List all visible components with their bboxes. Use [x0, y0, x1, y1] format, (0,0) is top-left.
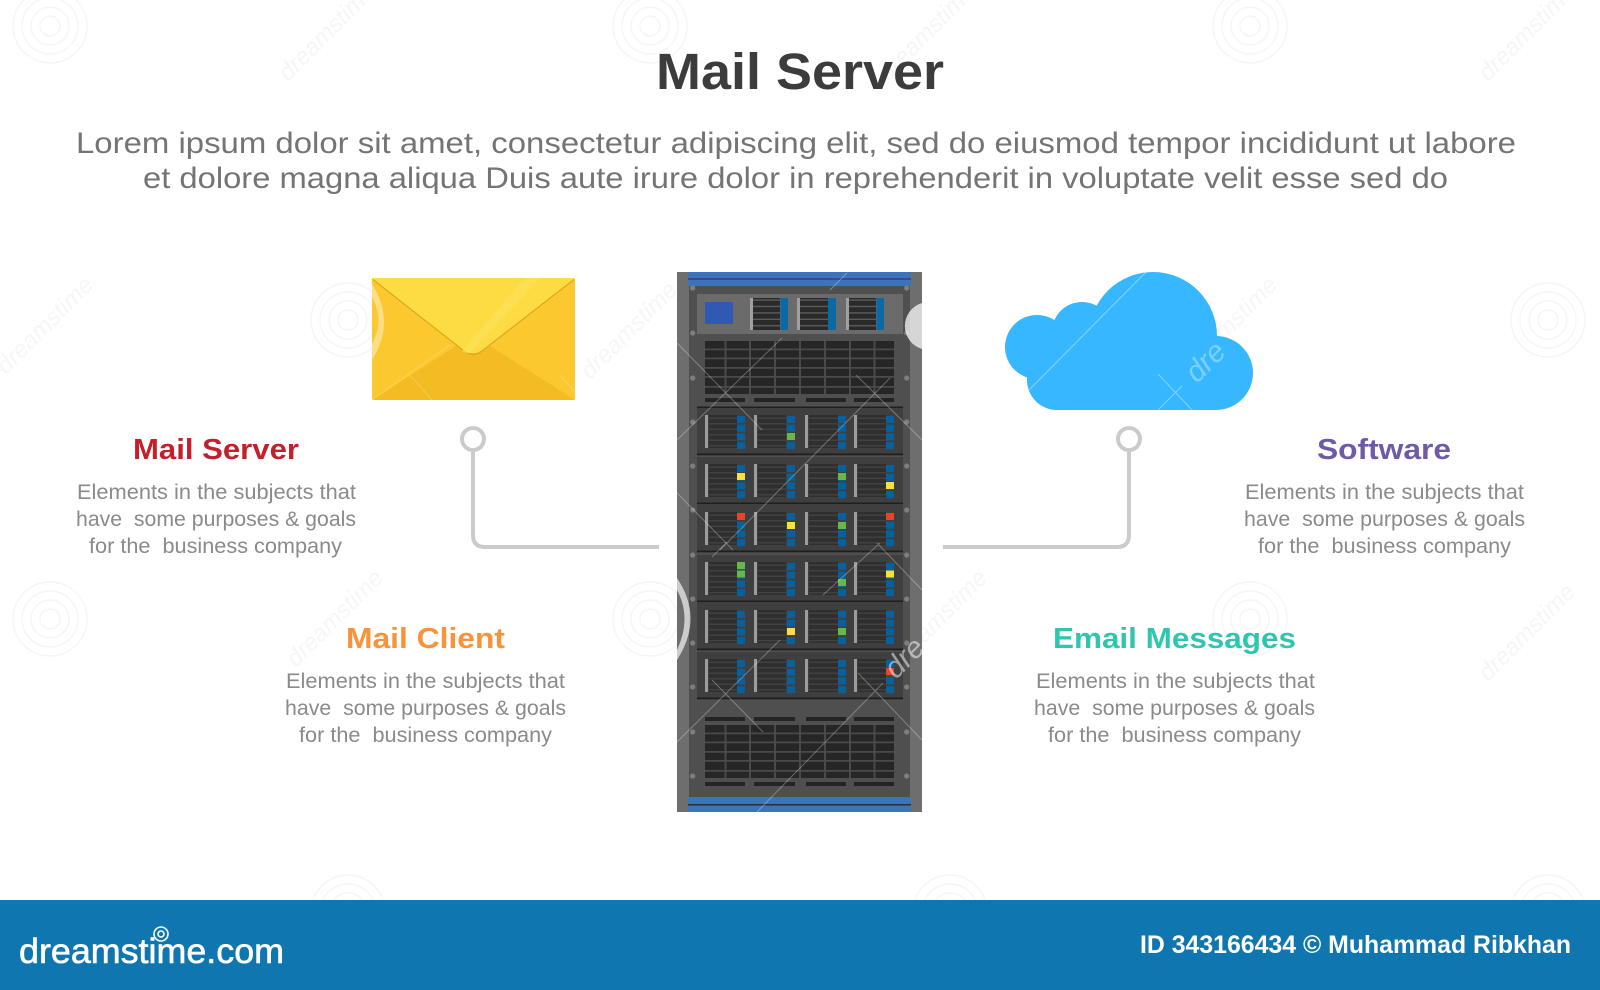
server unit 6 — [697, 652, 903, 699]
subtitle text block: Lorem ipsum dolor sit amet, consectetur adipiscing elit, sed do eiusmod tempor incididunt ut labore — [76, 127, 1516, 160]
description — [285, 670, 566, 747]
description: Elements in the subjects that — [286, 670, 565, 693]
rack screws — [690, 285, 909, 779]
connector: envelope to server — [462, 428, 659, 547]
heading: Mail Client — [346, 623, 505, 655]
label: Mail Client — [285, 623, 566, 747]
watermark overlay text — [878, 335, 1233, 685]
footer bar — [0, 900, 1600, 990]
server unit 5 — [697, 603, 903, 650]
description: Elements in the subjects that — [1036, 670, 1315, 693]
description: have some purposes & goals — [1244, 508, 1525, 531]
status lights — [737, 433, 894, 675]
watermark overlay spirals — [372, 284, 922, 660]
rack lower vent — [705, 717, 894, 786]
heading: Mail Server — [133, 434, 299, 466]
watermark pattern: dreamstime — [281, 564, 389, 672]
description: for the business company — [89, 535, 343, 558]
heading: Software — [1317, 434, 1451, 466]
heading: Email Messages — [1053, 623, 1296, 655]
connector: cloud to server — [943, 428, 1140, 547]
subtitle text block — [76, 127, 1516, 195]
description — [76, 481, 356, 558]
label: Mail Server — [76, 434, 356, 558]
description: have some purposes & goals — [1034, 697, 1315, 720]
icon: logo spiral — [154, 927, 168, 941]
watermark pattern: dreamstime — [1473, 578, 1581, 686]
footer logo: dreamstime.com — [19, 932, 284, 971]
watermark pattern: dreamstime — [1175, 271, 1283, 379]
description: Elements in the subjects that — [77, 481, 356, 504]
rack bottom blue bars — [688, 797, 911, 812]
server rack — [677, 272, 922, 812]
description: for the business company — [299, 724, 553, 747]
server unit 3 — [697, 505, 903, 552]
footer credit: ID 343166434 © Muhammad Ribkhan — [1140, 931, 1571, 959]
rack top control panel — [697, 294, 903, 334]
watermark overlay text: dre — [878, 631, 932, 685]
watermark pattern: dreamstime — [575, 276, 683, 384]
server unit 1 — [697, 408, 903, 455]
icon: envelope — [372, 278, 575, 400]
description: for the business company — [1048, 724, 1302, 747]
label: Email Messages — [1034, 623, 1315, 747]
watermark pattern: dreamstime — [885, 564, 993, 672]
server unit 4 — [697, 555, 903, 602]
icon: cloud — [1005, 272, 1253, 410]
description: have some purposes & goals — [285, 697, 566, 720]
description — [1244, 481, 1525, 558]
server unit 2 — [697, 457, 903, 504]
rack unit top edge — [697, 406, 903, 408]
label: Software — [1244, 434, 1525, 558]
description: for the business company — [1258, 535, 1512, 558]
rack upper vent — [705, 341, 894, 402]
description: Elements in the subjects that — [1245, 481, 1524, 504]
watermark overlay text: dre — [1179, 335, 1233, 389]
watermark overlay lines — [372, 272, 1192, 812]
subtitle text block: et dolore magna aliqua Duis aute irure dolor in reprehenderit in voluptate velit esse sed do — [143, 162, 1448, 195]
description — [1034, 670, 1315, 747]
description: have some purposes & goals — [76, 508, 356, 531]
rack top blue bars — [688, 272, 911, 286]
title: Mail Server — [656, 43, 944, 100]
